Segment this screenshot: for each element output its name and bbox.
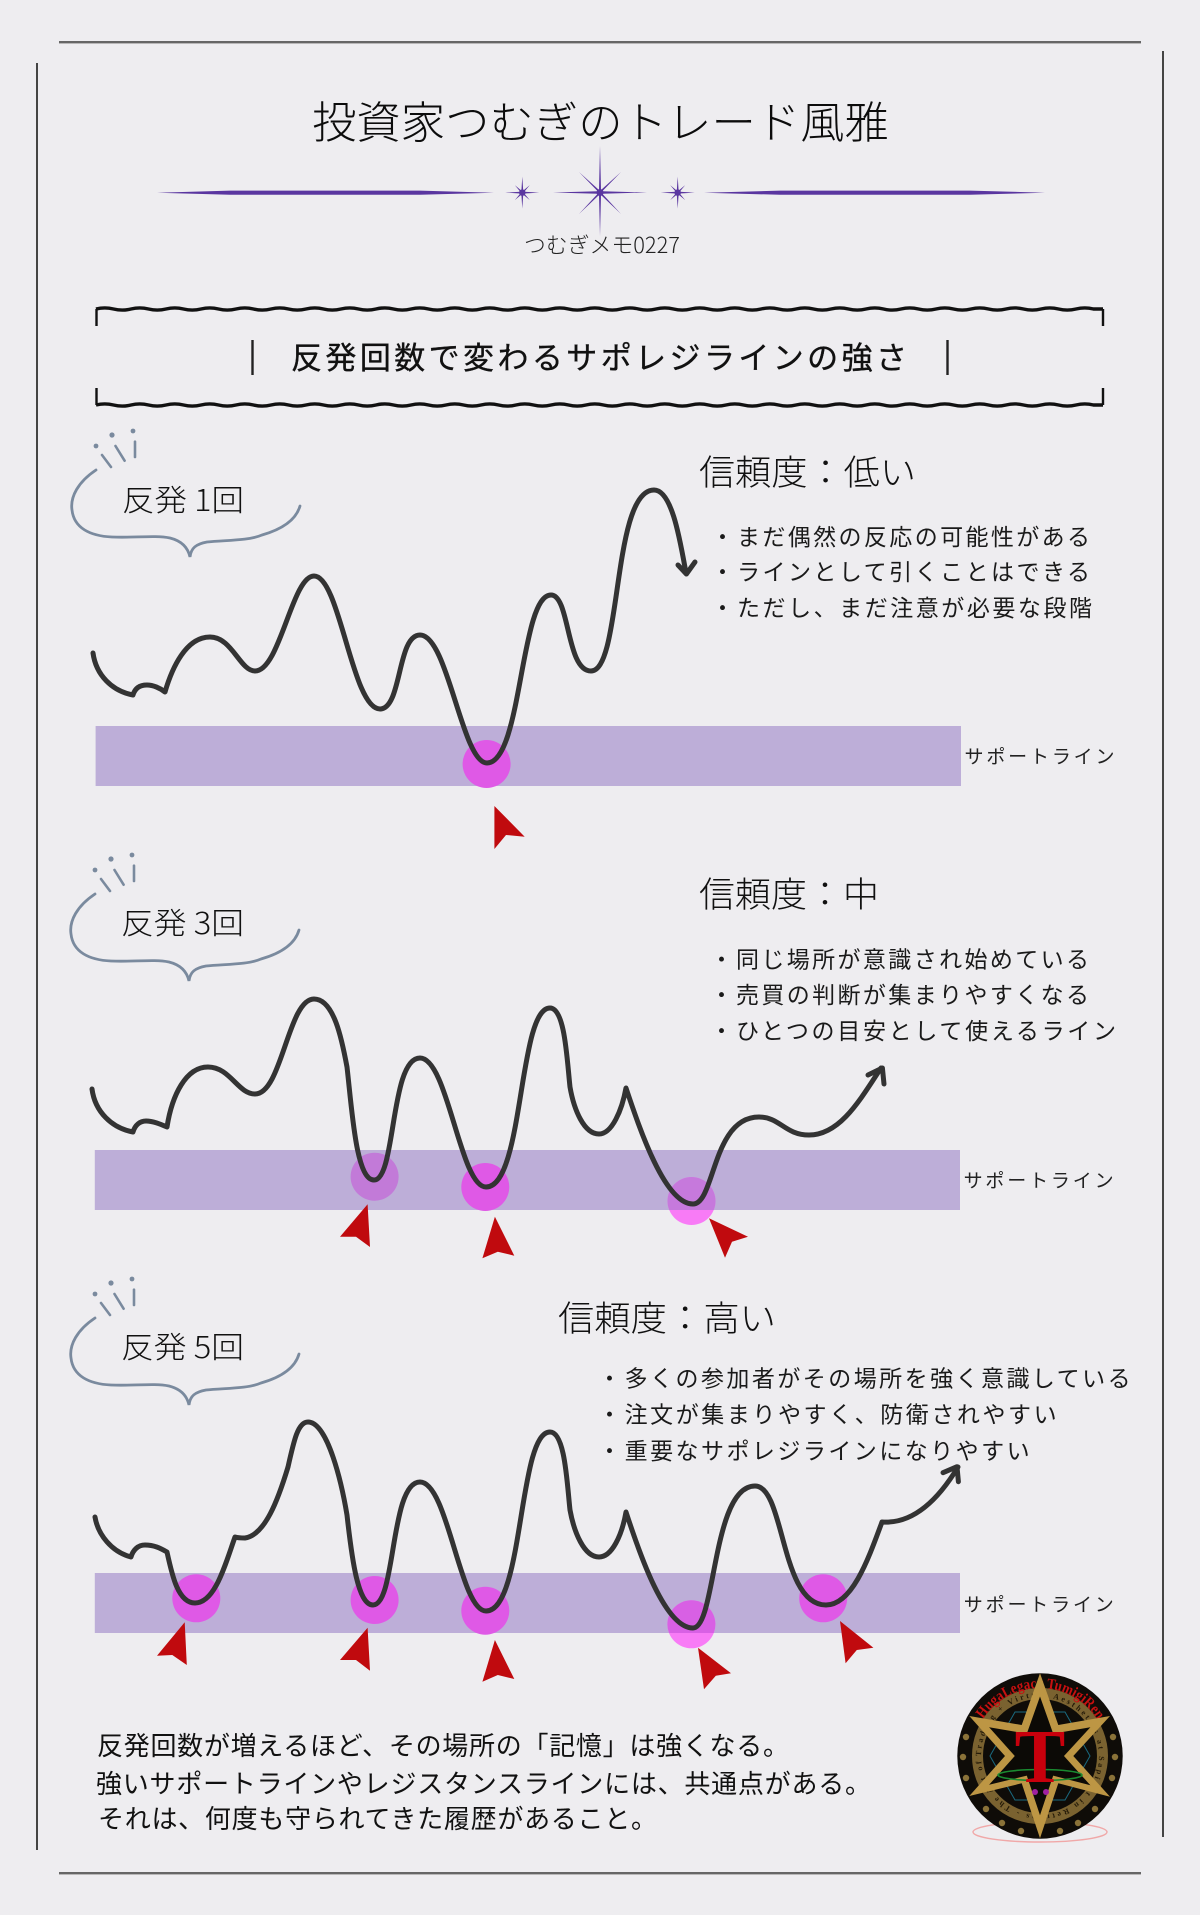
confidence notes: ・ [710, 940, 733, 974]
confidence notes: 売買の判断が集まりやすくなる [736, 976, 1089, 1010]
closing text block: 強いサポートラインやレジスタンスラインには、共通点がある。 [96, 1764, 871, 1801]
subtitle: つむぎメモ0227 [524, 228, 680, 260]
rebound circles [351, 1153, 716, 1225]
confidence heading: 信頼度：低い [699, 445, 916, 496]
support band [95, 1573, 960, 1633]
closing text block: 反発回数が増えるほど、その場所の「記憶」は強くなる。 [97, 1726, 789, 1763]
speech bubble: 反発 5回 [71, 1277, 299, 1405]
panel: 反発1回 [72, 429, 1115, 849]
panel: 反発5回 [71, 1277, 1131, 1689]
logo emblem: HugaLegacy TumigiRen [975, 1678, 1102, 1718]
speech bubble: 反発 3回 [71, 853, 299, 981]
logo emblem: T [1015, 1715, 1065, 1799]
support band [96, 726, 961, 786]
confidence notes: ・ [598, 1432, 621, 1466]
confidence notes: ただし、まだ注意が必要な段階 [737, 589, 1092, 623]
rebound circles [172, 1574, 847, 1648]
label: support line: サポートライン [964, 1590, 1114, 1617]
speech bubble: 反発 5回: 反発 5回 [121, 1323, 244, 1367]
label: support line: サポートライン [964, 742, 1114, 769]
confidence notes: ひとつの目安として使えるライン [736, 1012, 1116, 1046]
price line [95, 1422, 958, 1628]
rebound circle [463, 740, 511, 788]
closing text block [96, 1726, 871, 1836]
confidence notes: 注文が集まりやすく、防衛されやすい [625, 1396, 1057, 1430]
confidence notes: ・ [710, 976, 733, 1010]
label: support line: サポートライン [964, 1166, 1114, 1193]
confidence notes: 多くの参加者がその場所を強く意識している [625, 1360, 1131, 1394]
panel: 反発3回 [71, 853, 1116, 1258]
logo emblem: Trading + Virtue, Aesthetics at Sapient in Returns - The Art of [976, 1694, 1104, 1818]
price line [92, 999, 884, 1204]
speech bubble: 反発 1回: 反発 1回 [122, 476, 244, 520]
confidence notes: まだ偶然の反応の可能性がある [737, 518, 1090, 552]
title: 投資家つむぎのトレード風雅 [312, 87, 889, 151]
red arrows [340, 1204, 748, 1258]
confidence heading: 信頼度：中 [699, 867, 879, 918]
confidence heading: 信頼度：高い [558, 1291, 776, 1342]
confidence notes: 同じ場所が意識され始めている [736, 940, 1089, 974]
red arrow [494, 806, 525, 849]
confidence notes: ・ [598, 1360, 621, 1394]
confidence notes: ・ [711, 589, 734, 623]
red arrows [157, 1621, 873, 1689]
confidence notes [710, 940, 1116, 1046]
confidence notes: ・ [710, 1012, 733, 1046]
heading: 反発回数で変わるサポレジラインの強さ [291, 333, 907, 378]
confidence notes [598, 1360, 1131, 1466]
speech bubble: 反発 3回: 反発 3回 [121, 899, 244, 943]
confidence notes: ・ [598, 1396, 621, 1430]
confidence notes: ・ [711, 518, 734, 552]
confidence notes: ラインとして引くことはできる [737, 553, 1090, 587]
logo emblem [957, 1673, 1123, 1843]
speech bubble: 反発 1回 [72, 429, 300, 557]
price line [93, 490, 695, 763]
confidence notes [711, 518, 1092, 623]
support band [95, 1150, 960, 1210]
closing text block: それは、何度も守られてきた履歴があること。 [98, 1799, 657, 1836]
title ornament: purple sparkles and lines [157, 146, 1045, 236]
confidence notes: 重要なサポレジラインになりやすい [625, 1432, 1030, 1466]
heading frame [96, 308, 1103, 406]
confidence notes: ・ [711, 553, 734, 587]
